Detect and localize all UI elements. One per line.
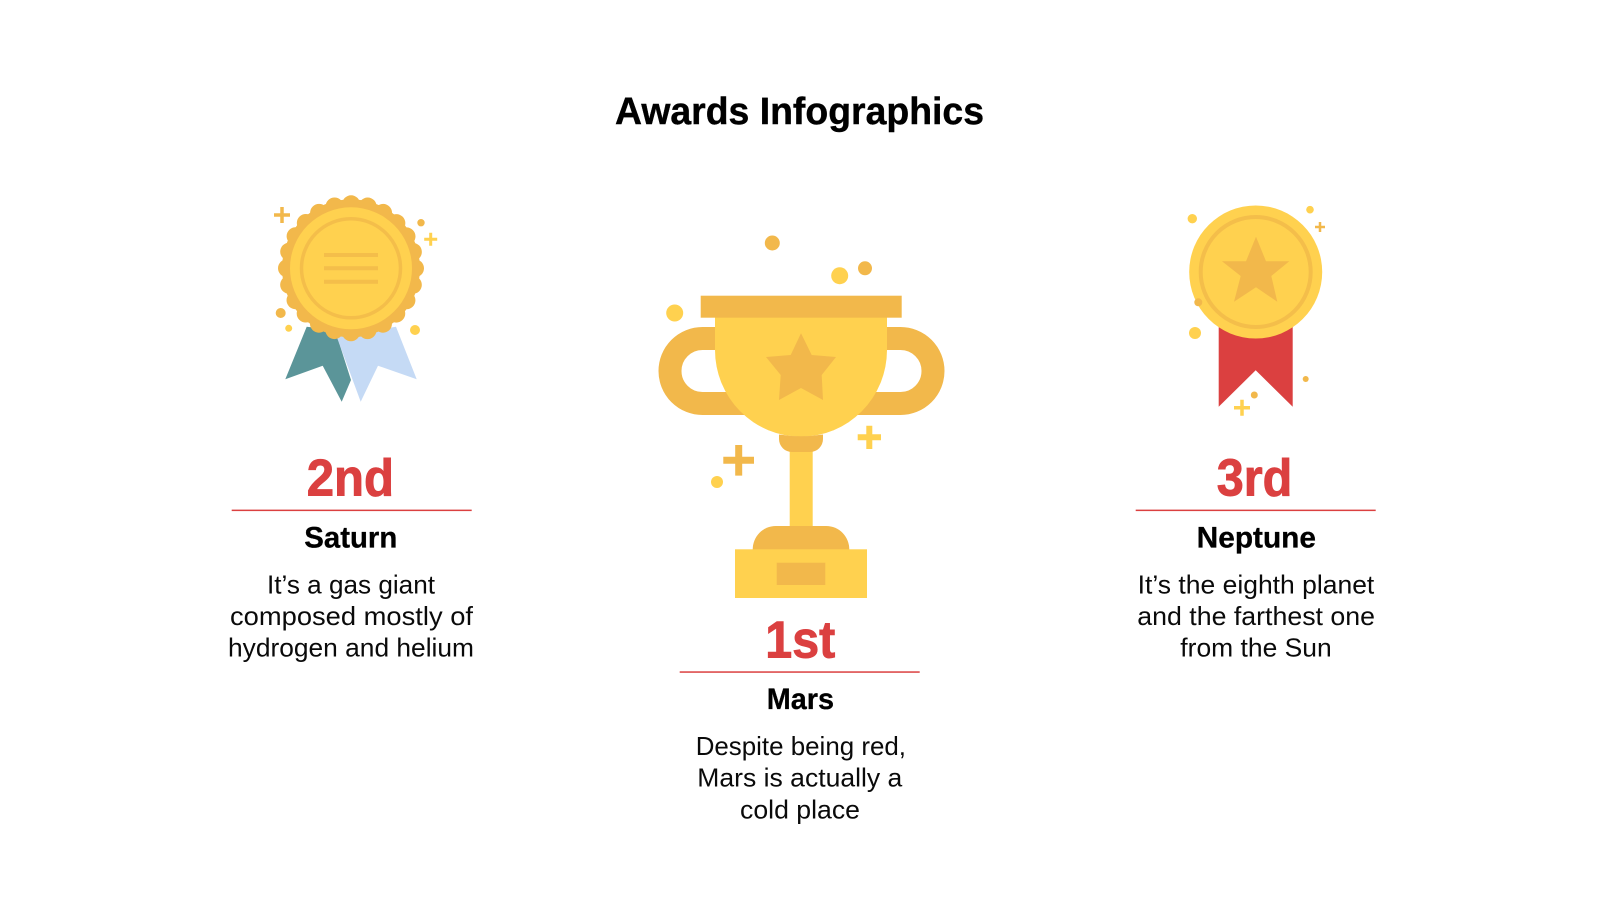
title: Awards Infographics	[615, 91, 984, 133]
description: Saturn: composed mostly of	[230, 601, 474, 631]
divider	[1136, 510, 1376, 511]
description: Mars: Mars is actually a	[697, 763, 903, 793]
rank: 2nd: 2nd	[307, 450, 394, 508]
rosette text lines	[324, 255, 378, 282]
trophy cup	[715, 317, 887, 437]
description: Mars: Despite being red,	[696, 731, 906, 761]
name: Mars: Mars	[767, 683, 834, 716]
sparkles	[274, 207, 437, 335]
panel: 1st place Mars	[666, 236, 933, 824]
rosette face	[290, 207, 412, 329]
description: Neptune: It’s the eighth planet	[1138, 569, 1375, 599]
medal disc	[1189, 206, 1322, 338]
rank: 3rd: 3rd	[1217, 450, 1292, 508]
medal ring	[1201, 217, 1311, 327]
rosette ring	[302, 219, 400, 318]
sparkles	[1188, 206, 1325, 416]
medal star	[1222, 237, 1289, 302]
divider	[680, 671, 920, 673]
divider	[232, 510, 472, 511]
description: Neptune: and the farthest one	[1137, 601, 1375, 631]
description: Saturn: It’s a gas giant	[267, 569, 436, 599]
icon: medal with red ribbon	[1188, 206, 1325, 416]
description: Saturn	[228, 569, 474, 662]
medal ribbon	[1219, 320, 1293, 407]
trophy star	[766, 333, 836, 400]
panel: 2nd place Saturn	[228, 199, 474, 662]
trophy base dome	[753, 526, 849, 550]
name: Neptune: Neptune	[1197, 521, 1316, 554]
description: Neptune: from the Sun	[1180, 632, 1332, 662]
panel: 3rd place Neptune	[1136, 206, 1376, 662]
icon: rosette medal with ribbons	[274, 199, 437, 402]
trophy base	[735, 549, 867, 598]
trophy plate	[777, 563, 825, 585]
trophy handles	[670, 338, 933, 404]
rank: 1st: 1st	[765, 611, 835, 669]
description: Neptune	[1137, 569, 1375, 662]
description: Saturn: hydrogen and helium	[228, 632, 474, 662]
description: Mars	[696, 731, 906, 824]
trophy stem	[790, 450, 813, 527]
ribbon: light blue	[337, 327, 417, 402]
ribbon: teal	[285, 327, 351, 402]
trophy collar	[779, 434, 823, 452]
trophy rim	[701, 296, 902, 318]
icon: trophy	[666, 236, 933, 598]
name: Saturn: Saturn	[304, 521, 397, 554]
rosette scalloped edge	[282, 199, 420, 337]
description: Mars: cold place	[740, 794, 860, 824]
sparkles	[666, 236, 881, 488]
